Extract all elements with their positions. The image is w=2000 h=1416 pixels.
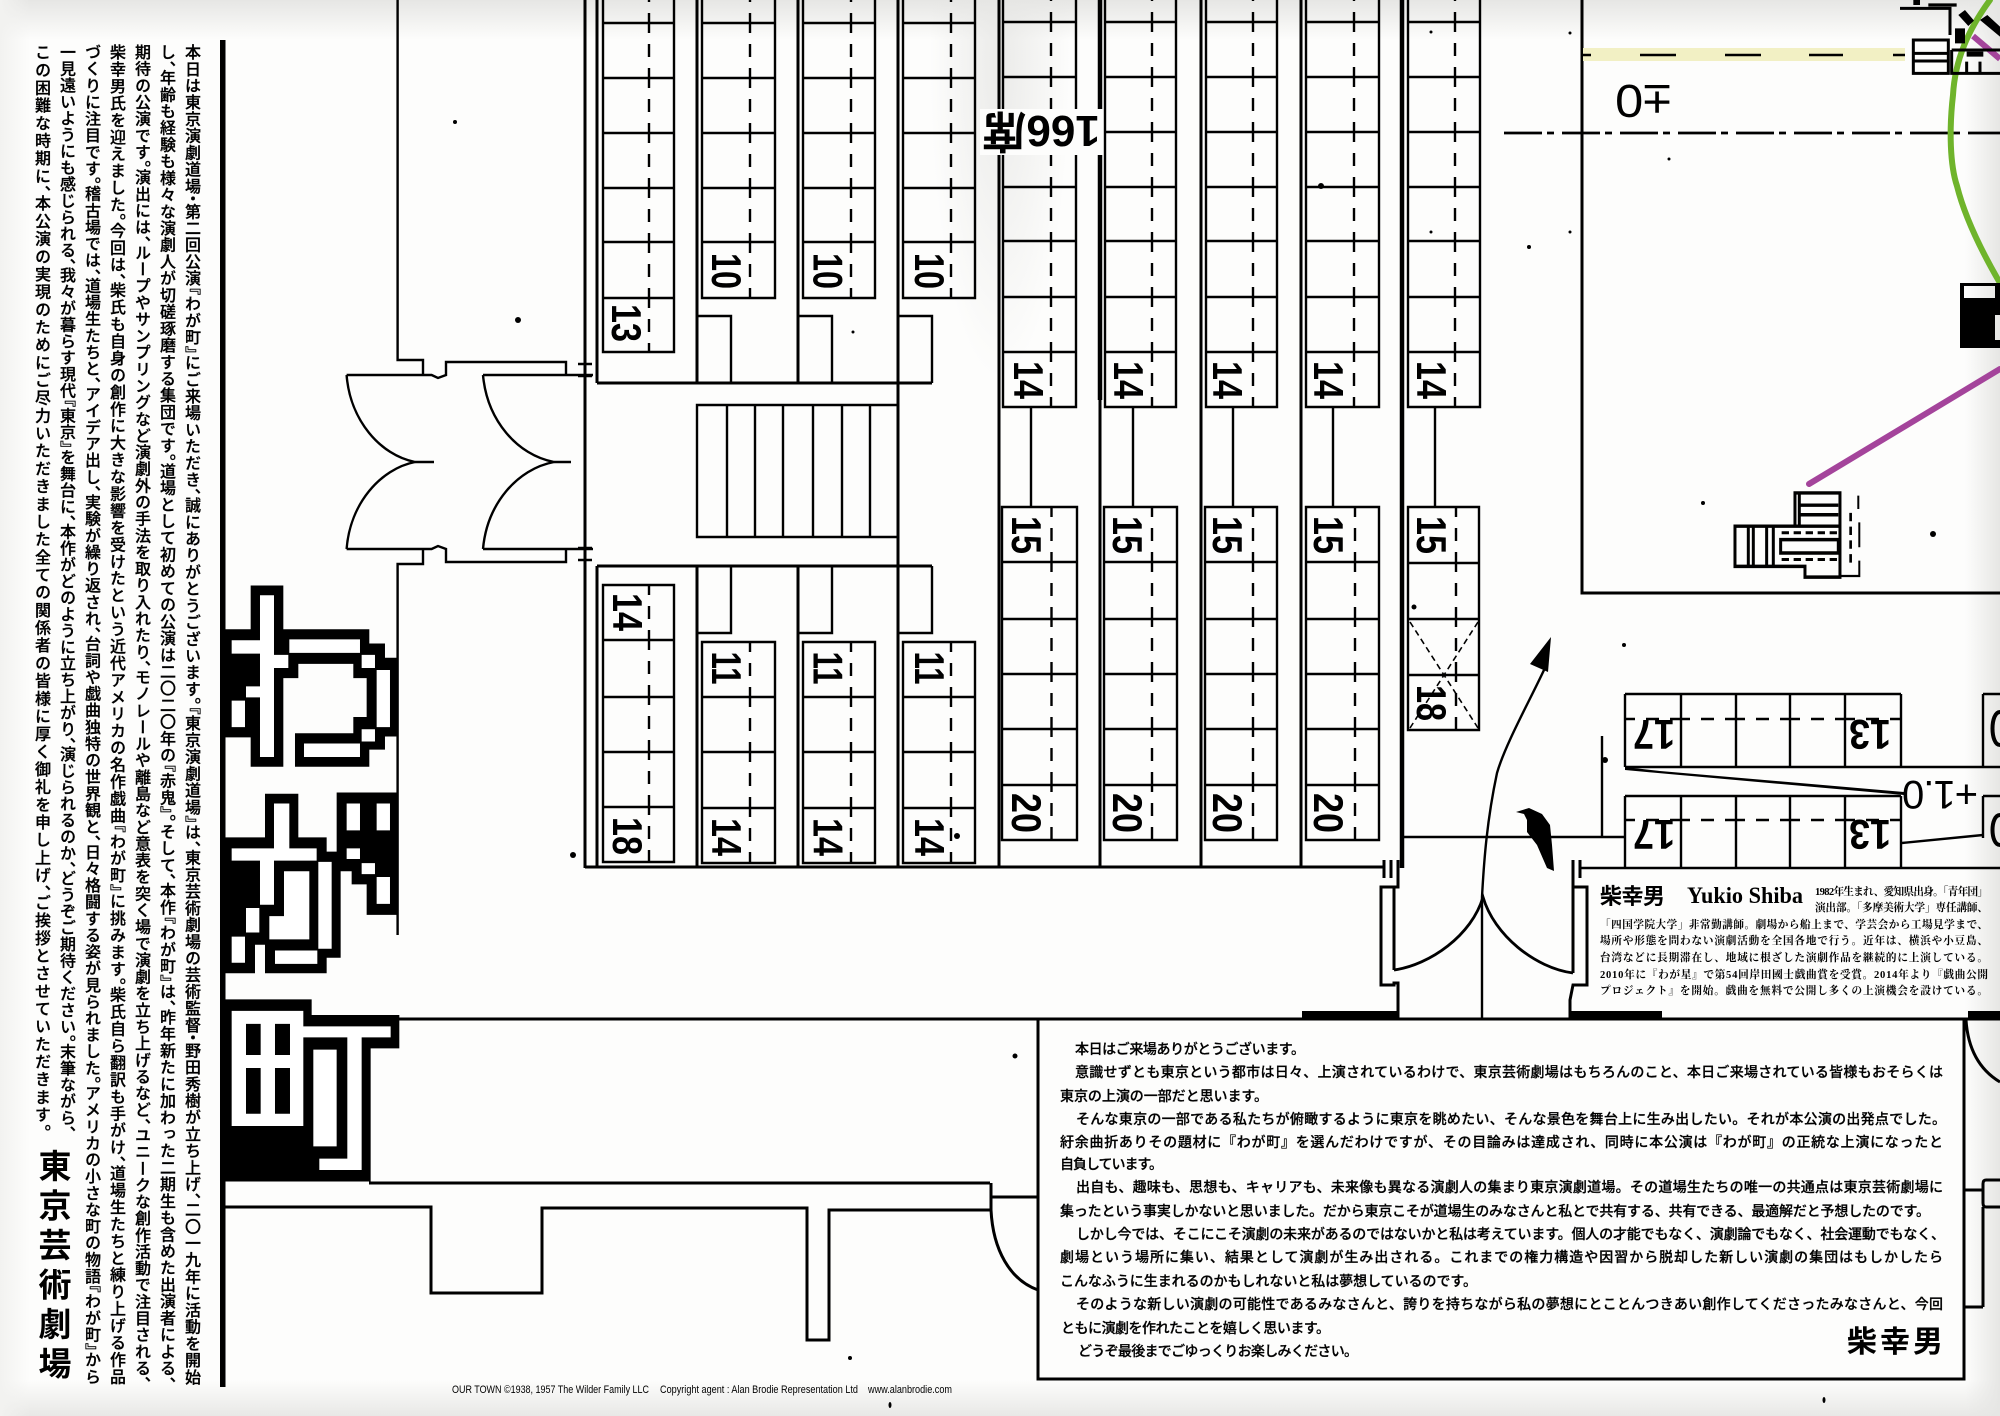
specks xyxy=(453,30,1936,1408)
seat column A upper xyxy=(603,0,674,352)
seat column I upper: 14 xyxy=(1408,361,1455,400)
panel: right seating blocks xyxy=(1402,694,2000,868)
top right set piece xyxy=(1900,0,2000,73)
seat column F lower: 20 xyxy=(1104,793,1151,833)
lower right seats: 17 xyxy=(1633,811,1675,858)
lower right seats xyxy=(1625,694,2000,868)
pixel character 3 xyxy=(220,999,399,1181)
panel: auditorium centre seating blocks xyxy=(980,0,1480,868)
message body text: 出自も、趣味も、思想も、キャリアも、未来像も異なる演劇人の集まり東京演劇道場。その道場生たちの唯一の共通点は東京芸術劇場に xyxy=(1076,1179,1943,1195)
small niches xyxy=(697,316,932,633)
panel: left doors and lobby walls xyxy=(221,0,1038,1340)
purple line lower xyxy=(1809,369,2000,484)
door arcs xyxy=(1394,897,1573,973)
short slope line xyxy=(1902,835,1983,843)
central stairs xyxy=(697,405,898,537)
right set piece black block xyxy=(1960,283,2000,348)
seat column E upper: 14 xyxy=(1005,361,1052,400)
seat column G upper: 14 xyxy=(1204,361,1251,400)
lower set piece xyxy=(1735,493,1859,577)
panel: pixel title xyxy=(220,586,399,1181)
bio body: 2010年に『わが星』で第54回岸田國士戯曲賞を受賞。2014年より『戯曲公開 xyxy=(1600,968,1988,981)
seat column B lower: 11 xyxy=(703,652,750,684)
level label +1.0: +1.0 xyxy=(1902,772,1978,816)
bio name: 柴幸男 xyxy=(1600,884,1665,909)
bio body: 台湾などに長期滞在し、地域に根ざした演劇作品を継続的に上演している。 xyxy=(1600,951,1988,964)
level label ±0: ±0 xyxy=(1615,75,1671,127)
seat column D lower xyxy=(903,642,975,863)
signature: 柴幸男 xyxy=(1847,1326,1943,1359)
seat column H upper xyxy=(1305,0,1379,507)
seat column D lower: 14 xyxy=(906,818,953,857)
bio body: プロジェクト』を開始。戯曲を無料で公開し多くの上演機会を設けている。 xyxy=(1600,984,1988,997)
seat column G lower: 20 xyxy=(1204,793,1251,833)
pixel character 2 xyxy=(220,792,398,973)
lower right seats: 13 xyxy=(1849,811,1891,858)
seat column A upper: 13 xyxy=(603,304,650,342)
slope line xyxy=(1625,767,1904,795)
message body text: そのような新しい演劇の可能性であるみなさんと、誇りを持ちながら私の夢想にとことんつきあい創作してくださったみなさんと、今回 xyxy=(1076,1296,1943,1312)
seat column B lower xyxy=(702,642,775,863)
copyright footer xyxy=(452,1384,952,1396)
message body text: そんな東京の一部である私たちが俯瞰するように東京を眺めたい、そんな景色を舞台上に生み出したい。それが本公演の出発点でした。 xyxy=(1076,1111,1946,1127)
bio body: 「四国学院大学」非常勤講師。劇場から船上まで、学芸会から工場見学まで、 xyxy=(1600,918,1988,931)
seat column G lower: 15 xyxy=(1204,516,1251,554)
seat column F upper xyxy=(1105,0,1176,507)
bio body: 1982年生まれ、愛知県出身。「青年団」 xyxy=(1815,885,1988,898)
organisation name vertical: 東京芸術劇場 xyxy=(34,1149,71,1386)
panel: stage outline and floor markings xyxy=(1504,0,2000,593)
aisle walls left block xyxy=(585,0,1384,868)
seat column C lower: 11 xyxy=(804,652,852,684)
seat column D upper xyxy=(903,0,975,298)
panel: biography xyxy=(1600,883,1988,997)
door arcs upper xyxy=(347,375,571,462)
bio body: 場所や形態を問わない演劇活動を全国各地で行う。近年は、横浜や小豆島、 xyxy=(1600,934,1988,947)
seat column B upper: 10 xyxy=(703,253,750,289)
intro text column 7: この困難な時期に 、 本公演の実現のためにご尽力いただきました全ての関係者の皆様に厚く御礼を申し上げ 、 ご挨拶とさせていただきます 。 xyxy=(32,44,49,1134)
copyright footer: OUR TOWN ©1938, 1957 The Wilder Family LLC xyxy=(452,1384,649,1396)
aisle line xyxy=(1402,736,2000,868)
bio body: 演出部。「多摩美術大学」専任講師、 xyxy=(1815,901,1988,914)
stage walls xyxy=(1582,0,2000,593)
lobby wall xyxy=(221,1019,1038,1340)
seat column C lower xyxy=(803,642,875,863)
message frame xyxy=(1038,1019,1964,1379)
partial seat numbers on the right edge xyxy=(1992,712,2000,845)
seat column I lower with crossed box: 18 xyxy=(1408,685,1455,721)
pixel character 1 xyxy=(220,586,398,767)
seat column B upper xyxy=(702,0,775,298)
seat column H upper: 14 xyxy=(1305,361,1352,400)
thick aisle wall xyxy=(1100,0,1402,868)
centre line dash-dot xyxy=(1504,132,2000,134)
green curve xyxy=(1951,0,2000,283)
seat column G upper xyxy=(1204,0,1277,507)
left wall upper xyxy=(347,0,593,378)
seat column A lower: 14 xyxy=(604,593,651,632)
purple line upper xyxy=(1973,36,2000,59)
panel: director message xyxy=(1038,1019,1964,1379)
seat column F lower xyxy=(1104,507,1177,840)
intro text column 4: 柴幸男氏を迎えました 。 今回は 、 柴氏も自身の創作に大きな影響を受けたという近代アメリカの名作戯曲 『 わが町 』 に挑みます 。 柴氏自ら翻訳も手がけ 、 道場生たちと練り上げる作品 xyxy=(107,44,124,1385)
bio name latin: Yukio Shiba xyxy=(1687,883,1803,908)
seat column I lower with crossed box: 15 xyxy=(1408,516,1455,554)
intro text column 5: づくりに注目です 。 稽古場では 、 道場生たちと 、 アイデア出し 、 実験が繰り返され 、 台詞や戯曲独特の世界観と 、 日々格闘する姿が見られました 。 アメリカの小さな町の物語 『 わが町 』 から xyxy=(82,44,99,1385)
door jambs xyxy=(1381,860,1587,1019)
message body text: 東京の上演の一部だと思います。 xyxy=(1060,1088,1268,1104)
seat column F upper: 14 xyxy=(1105,361,1152,400)
seat column D upper: 10 xyxy=(906,253,953,289)
upper right seats: 17 xyxy=(1633,711,1675,758)
panel: right door with arrow and crow xyxy=(1381,637,1587,1020)
aisle walls centre block xyxy=(999,0,1301,868)
intro text column 6: 一見遠いようにも感じられる 、 我々が暮らす現代 『 東京 』 を舞台に 、 本作がどのように立ち上がり 、 演じられるのか 、 どうぞご期待ください 。 末筆ながら 、 xyxy=(57,44,74,1134)
intro text column 2: し 、 年齢も経験も様々な演劇人が切磋琢磨する集団です 。 道場として初めての公演は二〇二〇年の 『 赤鬼 』 。 そして 、 本作 『 わが町 』 は 、 昨年新たに加わった二期生も含めた出演者による 、 xyxy=(157,44,174,1385)
seat column C upper: 10 xyxy=(804,253,852,289)
seat column E lower: 20 xyxy=(1003,793,1050,833)
door arcs lower xyxy=(347,462,554,549)
seat column A lower: 18 xyxy=(604,817,651,855)
seat column E lower: 15 xyxy=(1003,516,1050,554)
seat column E lower xyxy=(1002,507,1077,840)
seat column D lower: 11 xyxy=(906,652,953,684)
message body text: 意識せずとも東京という都市は日々、上演されているわけで、東京芸術劇場はもちろんのこと、本日ご来場されている皆様もおそらくは xyxy=(1075,1064,1943,1080)
arrowhead xyxy=(1530,637,1551,672)
upper right seats: 13 xyxy=(1849,711,1891,758)
message body text: 集ったという事実しかないと思いました。だから東京こそが道場生のみなさんと私とで共有する、共有できる、最適解だと予想したのです。 xyxy=(1060,1203,1930,1219)
copyright footer: www.alanbrodie.com xyxy=(867,1384,952,1396)
bio body xyxy=(1600,885,1988,997)
message body text: しかし今では、そこにこそ演劇の未来があるのではないかと私は考えています。個人の才能でもなく、演劇論でもなく、社会運動でもなく、 xyxy=(1076,1226,1945,1242)
intro text column 3: 期待の公演です 。 演出には 、 ループやサンプリングなど演劇外の手法を取り入れたり 、 モノレールや離島など意表を突く場で演劇を立ち上げるなど 、 ユニークな創作活動で注目される 、 xyxy=(132,44,149,1385)
message body text: 本日はご来場ありがとうございます。 xyxy=(1075,1041,1305,1057)
left wall lower xyxy=(347,546,593,935)
yellow highlighted line xyxy=(1583,48,1905,61)
message body text: 自負しています。 xyxy=(1060,1156,1163,1172)
message body text: ともに演劇を作れたことを嬉しく思います。 xyxy=(1061,1320,1330,1336)
arrow shaft xyxy=(1482,670,1544,1020)
seat column I lower with crossed box xyxy=(1408,507,1479,730)
seat count label 166席: 166席 xyxy=(982,106,1100,155)
message body text: こんなふうに生まれるのかもしれないと私は夢想しているのです。 xyxy=(1060,1273,1477,1289)
icon: crow xyxy=(1516,808,1554,871)
seat column A lower xyxy=(603,585,674,862)
upper right seats xyxy=(1625,694,2000,767)
copyright footer: Copyright agent : Alan Brodie Representation Ltd xyxy=(660,1384,858,1396)
stage dashed line xyxy=(1583,54,1905,56)
panel: auditorium left seating blocks xyxy=(585,0,1384,868)
seat column G lower xyxy=(1204,507,1277,840)
message body text: どうぞ最後までごゆっくりお楽しみください。 xyxy=(1078,1343,1358,1359)
seat column C lower: 14 xyxy=(804,818,852,857)
message body text: 劇場という場所に集い、結果として演劇が生み出される。これまでの権力構造や因習から脱却した新しい演劇の集団はもしかしたら xyxy=(1060,1249,1943,1265)
intro text column 1: 本日は東京演劇道場 ・ 第二回公演 『 わが町 』 にご来場いただき 、 誠にありがとうございます 。 『 東京演劇道場 』 は 、 東京芸術劇場の芸術監督 ・ 野田秀樹が立ち上げ 、 二〇一九年に活動を開始 xyxy=(182,44,199,1385)
seat column I upper xyxy=(1408,0,1480,507)
seat column H lower: 15 xyxy=(1305,516,1352,554)
seat column H lower xyxy=(1305,507,1379,840)
thick vertical rule xyxy=(220,40,226,1387)
message body text: 紆余曲折ありその題材に『わが町』を選んだわけですが、その目論みは達成され、同時に本公演は『わが町』の正統な上演になったと xyxy=(1060,1134,1943,1150)
seat column C upper xyxy=(803,0,875,298)
seat column F lower: 15 xyxy=(1104,516,1151,554)
seat column H lower: 20 xyxy=(1305,793,1352,833)
seat column E upper xyxy=(1003,0,1076,507)
bottom wall line xyxy=(397,1011,2000,1307)
seat column B lower: 14 xyxy=(703,818,750,857)
message body text xyxy=(1060,1041,1946,1359)
